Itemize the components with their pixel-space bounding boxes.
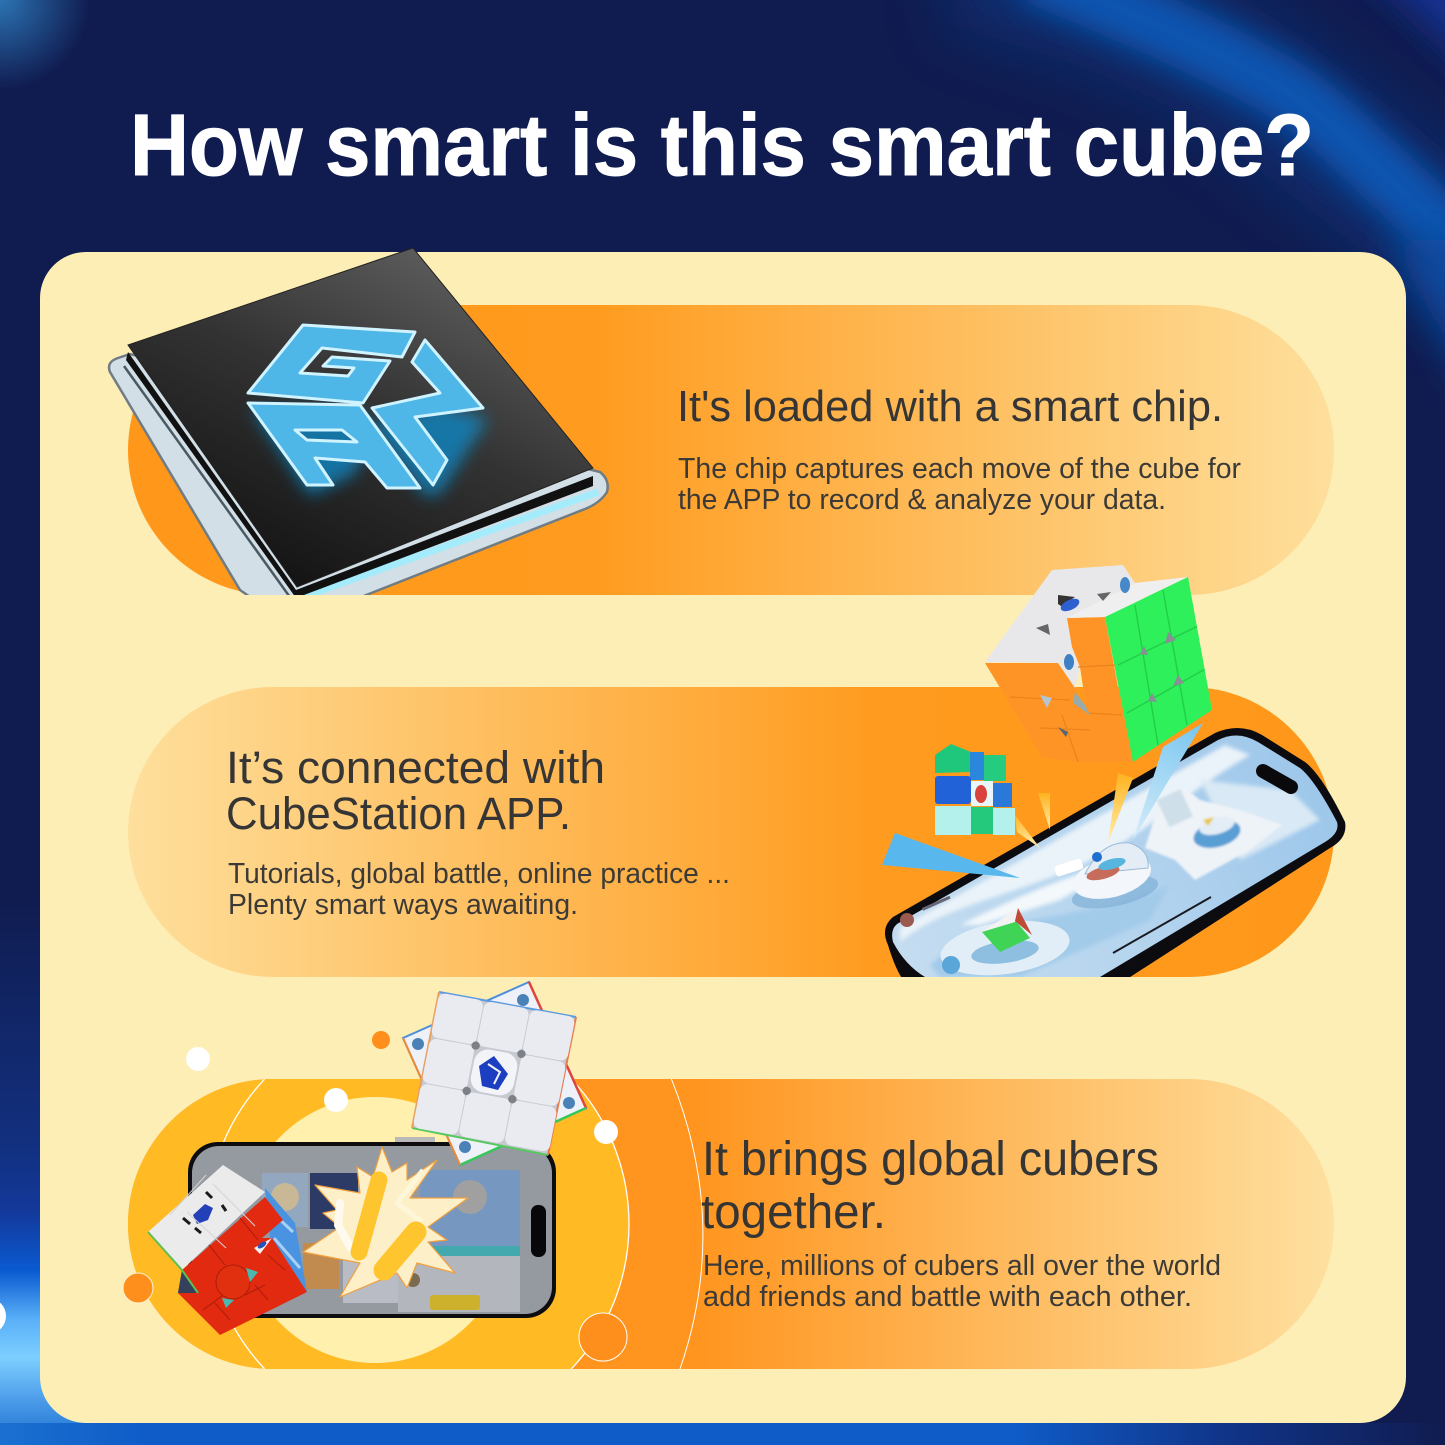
heading: It’s connected with xyxy=(226,742,605,793)
home indicator xyxy=(1113,897,1211,953)
text block: Plenty smart ways awaiting. xyxy=(228,889,578,921)
text block: Tutorials, global battle, online practice ... xyxy=(228,858,730,890)
arrow: light blue beam xyxy=(1133,723,1203,840)
icon: phone battle screen xyxy=(188,1137,556,1318)
panel: main card xyxy=(40,252,1406,1423)
pill background xyxy=(128,687,1334,977)
center platform xyxy=(1054,842,1158,908)
pill background xyxy=(128,1079,1334,1369)
heading: It's loaded with a smart chip. xyxy=(677,382,1223,431)
arrow: yellow beam small xyxy=(1038,793,1050,830)
heading: CubeStation APP. xyxy=(226,788,571,839)
text block: the APP to record & analyze your data. xyxy=(678,484,1166,516)
yellow circles xyxy=(128,1079,704,1369)
icon: GAN logo xyxy=(248,325,488,496)
heading xyxy=(226,742,605,839)
arrow: yellow beam centre xyxy=(1108,773,1133,843)
pill background xyxy=(128,305,1334,595)
heading: It brings global cubers xyxy=(702,1133,1159,1186)
panel: global cubers row xyxy=(122,980,1334,1369)
panel: CubeStation APP row xyxy=(128,565,1345,990)
right platform xyxy=(1145,788,1282,880)
heading: together. xyxy=(701,1186,886,1239)
arrow: yellow beam left xyxy=(1015,815,1040,848)
text block: The chip captures each move of the cube for xyxy=(678,453,1241,485)
icon: phone with app xyxy=(885,728,1345,990)
icon: orange green cube xyxy=(985,565,1212,762)
text block xyxy=(228,858,730,921)
text block: add friends and battle with each other. xyxy=(703,1281,1192,1313)
icon: GAN chip xyxy=(109,248,608,625)
icon: red cube xyxy=(148,1165,307,1335)
lower platform xyxy=(940,908,1070,976)
decorative dots xyxy=(123,1031,627,1361)
icon: VS burst xyxy=(303,1147,468,1297)
icon: small cube fragment xyxy=(935,744,1015,835)
heading xyxy=(701,1133,1159,1239)
text block xyxy=(678,453,1241,516)
icon: white cube on top xyxy=(403,982,586,1165)
title: How smart is this smart cube? xyxy=(130,97,1314,194)
text block xyxy=(703,1250,1221,1313)
notch xyxy=(1263,771,1291,787)
text block: Here, millions of cubers all over the world xyxy=(703,1250,1221,1282)
panel: smart chip row xyxy=(109,248,1334,625)
arrow: blue beam left xyxy=(882,833,1020,878)
